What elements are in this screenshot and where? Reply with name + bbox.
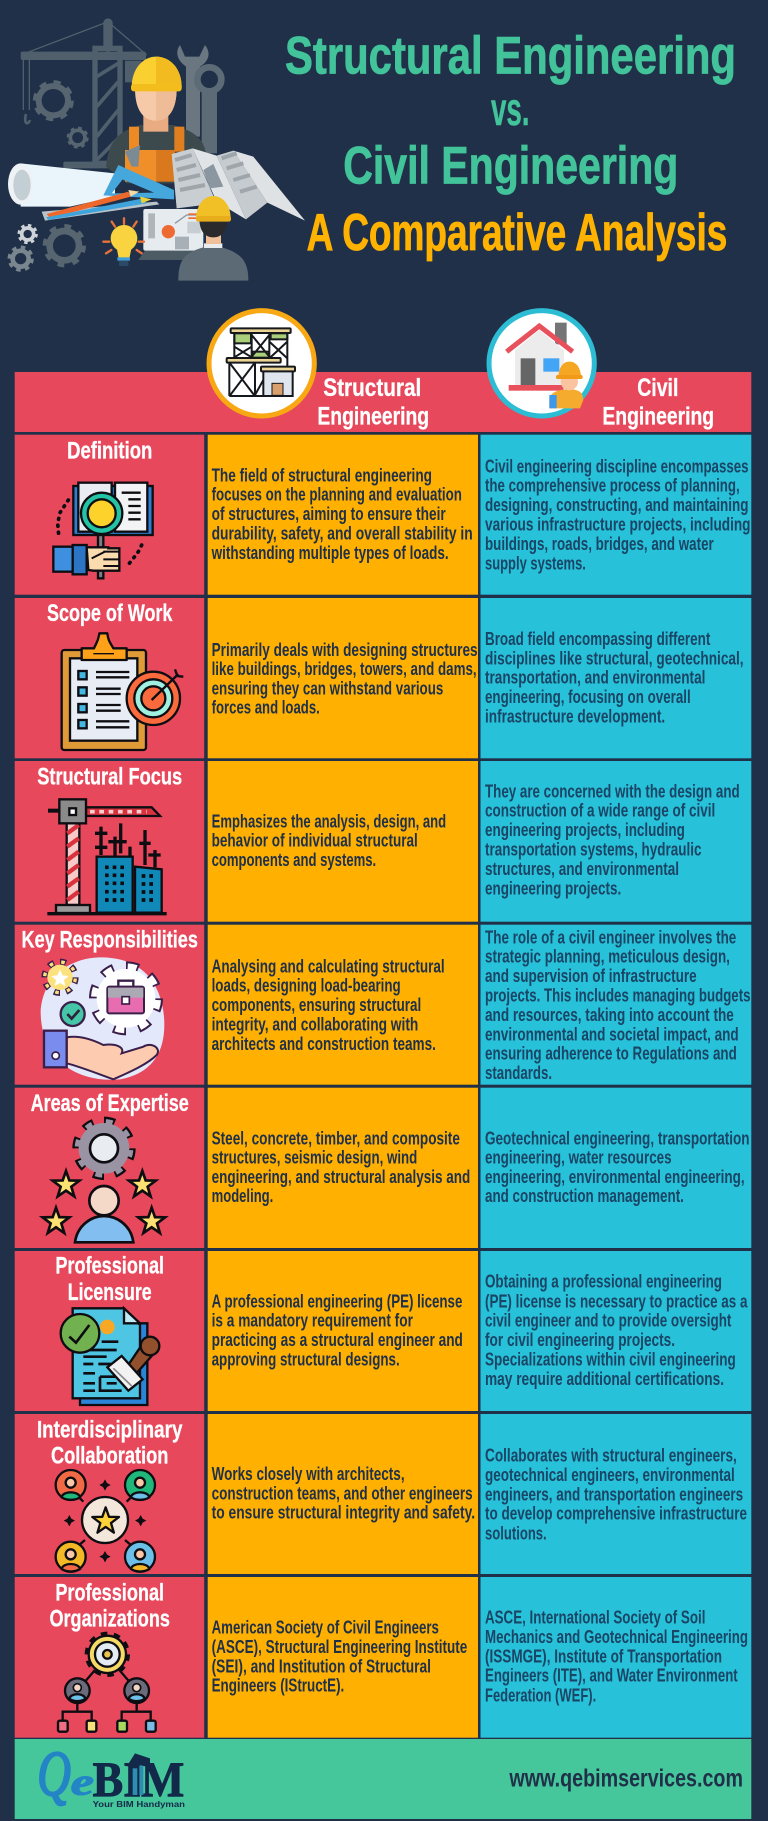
cell: structural definition <box>208 435 478 595</box>
icon: clipboard and target <box>62 633 183 750</box>
cell: label: Interdisciplinary <box>37 1417 183 1444</box>
cell: label: Key Responsibilities <box>22 927 198 954</box>
cell: civil responsibilities <box>480 925 751 1085</box>
cell: civil focus <box>480 761 751 922</box>
cell: civil licensure <box>480 1251 751 1411</box>
hero illustration: engineers with blueprints <box>8 18 305 281</box>
cell: structural focus: behavior of individual structural <box>212 830 418 851</box>
table header band <box>15 372 751 432</box>
foreground gears <box>9 225 84 270</box>
footer band <box>15 1739 751 1819</box>
cell: label <box>15 435 204 595</box>
title <box>285 26 736 262</box>
icon: scaffolding in circle <box>209 311 314 416</box>
cell: label <box>15 1088 204 1248</box>
cell: structural organizations: American Society of Civil Engineers <box>212 1617 439 1638</box>
logo: QeBIM: Your BIM Handyman <box>93 1799 185 1809</box>
cell: structural definition: withstanding multiple types of loads. <box>211 542 449 563</box>
cell: structural scope: ensuring they can withstand various <box>212 677 443 698</box>
folded plan sheets <box>172 148 305 221</box>
logo: QeBIM: e <box>71 1761 94 1803</box>
icon: connected people around a star <box>56 1470 155 1572</box>
cell: structural expertise <box>208 1088 478 1248</box>
column heading: Civil Engineering <box>602 374 714 430</box>
cell: structural definition: durability, safety, and overall stability in <box>212 522 473 543</box>
cell: structural focus: components and systems. <box>212 849 376 870</box>
cell: civil licensure: for civil engineering projects. <box>485 1329 675 1350</box>
cell: label: Professional <box>55 1253 164 1280</box>
cell: structural responsibilities: components, ensuring structural <box>212 994 421 1015</box>
cell: civil collaboration: solutions. <box>485 1523 547 1544</box>
cell: label <box>15 761 204 922</box>
cell: civil definition <box>480 435 751 595</box>
cell: structural definition: The field of structural engineering <box>212 465 432 486</box>
cell: civil focus: engineering projects. <box>485 877 621 898</box>
row: Interdisciplinary Collaboration <box>15 1414 751 1574</box>
cell: label: Licensure <box>68 1279 152 1306</box>
row: Areas of Expertise <box>15 1088 751 1248</box>
cell: civil scope <box>480 598 751 758</box>
icon: organisation hierarchy <box>58 1634 156 1732</box>
cell: label <box>15 1414 204 1574</box>
cell: structural scope: like buildings, bridges, towers, and dams, <box>212 658 477 679</box>
laptop with charts <box>138 209 203 260</box>
cell: civil definition: supply systems. <box>485 552 586 573</box>
cell: structural collaboration <box>208 1414 478 1574</box>
icon: crane and buildings <box>47 799 167 914</box>
icon: gear, stars and person <box>43 1122 165 1242</box>
cell: structural focus: Emphasizes the analysis, design, and <box>212 810 446 831</box>
cell: civil expertise: and construction management. <box>485 1185 684 1206</box>
cell: label <box>15 1577 204 1738</box>
cell: civil expertise <box>480 1088 751 1248</box>
column heading: Civil Engineering: Civil <box>637 374 678 402</box>
cell: civil responsibilities: standards. <box>485 1062 552 1083</box>
logo: QeBIM: Q <box>37 1739 71 1809</box>
title: vs. <box>491 83 530 135</box>
title: Civil Engineering <box>343 136 678 195</box>
cell: structural definition: of structures, aiming to ensure their <box>212 503 446 524</box>
cell: label: Structural Focus <box>37 763 182 790</box>
triangle ruler and pencils <box>46 165 174 220</box>
cell: structural licensure <box>208 1251 478 1411</box>
cell: structural organizations <box>208 1577 478 1738</box>
logo: QeBIM: BIM <box>93 1751 184 1807</box>
cell: structural responsibilities: integrity, and collaborating with <box>212 1013 418 1034</box>
cell: civil organizations <box>480 1577 751 1738</box>
cell: structural focus <box>208 761 478 922</box>
cell: structural licensure: approving structural designs. <box>212 1348 400 1369</box>
cell: label <box>15 925 204 1085</box>
icon: hand holding gears and briefcase <box>41 957 164 1080</box>
cell: structural organizations: (ASCE), Structural Engineering Institute <box>212 1636 467 1657</box>
row: Professional Organizations <box>15 1577 751 1738</box>
cell: structural scope <box>208 598 478 758</box>
cell: structural responsibilities <box>208 925 478 1085</box>
cell: structural expertise: structures, seismic design, wind <box>212 1147 417 1168</box>
cell: structural licensure: practicing as a structural engineer and <box>212 1329 463 1350</box>
cell: civil organizations: Federation (WEF). <box>485 1685 596 1706</box>
cell: label: Professional <box>55 1580 164 1607</box>
tower crane silhouette <box>21 18 147 168</box>
column heading: Structural Engineering: Structural <box>323 374 421 402</box>
cell: structural collaboration: construction teams, and other engineers <box>212 1482 473 1503</box>
cell: structural licensure: A professional engineering (PE) license <box>212 1290 462 1311</box>
cell: civil collaboration <box>480 1414 751 1574</box>
light bulb <box>103 218 144 266</box>
cell: label: Organizations <box>49 1606 170 1633</box>
cell: civil scope: infrastructure development. <box>485 706 665 727</box>
cell: structural responsibilities: architects and construction teams. <box>212 1033 436 1054</box>
column heading: Structural Engineering: Engineering <box>317 402 429 430</box>
cell: structural definition: focuses on the planning and evaluation <box>212 484 462 505</box>
cell: structural scope: forces and loads. <box>212 696 320 717</box>
cell: structural expertise: engineering, and structural analysis and <box>212 1166 470 1187</box>
wrenches <box>177 45 221 153</box>
blueprint roll <box>8 163 159 221</box>
cell: civil scope: engineering, focusing on overall <box>485 686 691 707</box>
background gears <box>35 82 87 147</box>
row: Professional Licensure <box>15 1251 751 1411</box>
cell: civil focus: engineering projects, including <box>485 819 685 840</box>
cell: label: Scope of Work <box>47 600 173 627</box>
cell: structural licensure: is a mandatory requirement for <box>212 1310 413 1331</box>
row: Key Responsibilities <box>15 925 751 1085</box>
cell: label: Definition <box>67 437 152 464</box>
cell: structural scope: Primarily deals with designing structures <box>212 639 478 660</box>
logo: QeBIM <box>37 1739 185 1809</box>
cell: structural responsibilities: Analysing and calculating structural <box>212 956 445 977</box>
cell: structural organizations: (SEI), and Institution of Structural <box>212 1655 431 1676</box>
icon: house with worker in circle <box>489 311 594 416</box>
row: Scope of Work <box>15 598 751 758</box>
cell: structural expertise: modeling. <box>212 1185 273 1206</box>
column heading: Structural Engineering <box>317 374 429 430</box>
cell: structural responsibilities: loads, designing load-bearing <box>212 975 401 996</box>
cell: label <box>15 1251 204 1411</box>
icon: magnifier over book <box>53 483 153 578</box>
main worker <box>106 57 206 183</box>
cell: civil expertise: engineering, water resources <box>485 1147 672 1168</box>
icon: certificate with stamp <box>61 1308 159 1405</box>
cell: civil focus: structures, and environmental <box>485 858 679 879</box>
cell: label: Areas of Expertise <box>31 1090 189 1117</box>
second worker <box>178 196 248 281</box>
cell: label <box>15 598 204 758</box>
row: Definition <box>15 435 751 595</box>
cell: structural collaboration: Works closely with architects, <box>212 1463 405 1484</box>
cell: structural expertise: Steel, concrete, timber, and composite <box>212 1127 460 1148</box>
cell: structural organizations: Engineers (IStructE). <box>212 1675 344 1696</box>
column heading: Civil Engineering: Engineering <box>602 402 714 430</box>
cell: label: Collaboration <box>51 1442 168 1469</box>
cell: structural collaboration: to ensure structural integrity and safety. <box>212 1502 475 1523</box>
cell: civil responsibilities: and supervision of infrastructure <box>485 965 697 986</box>
row: Structural Focus <box>15 761 751 922</box>
